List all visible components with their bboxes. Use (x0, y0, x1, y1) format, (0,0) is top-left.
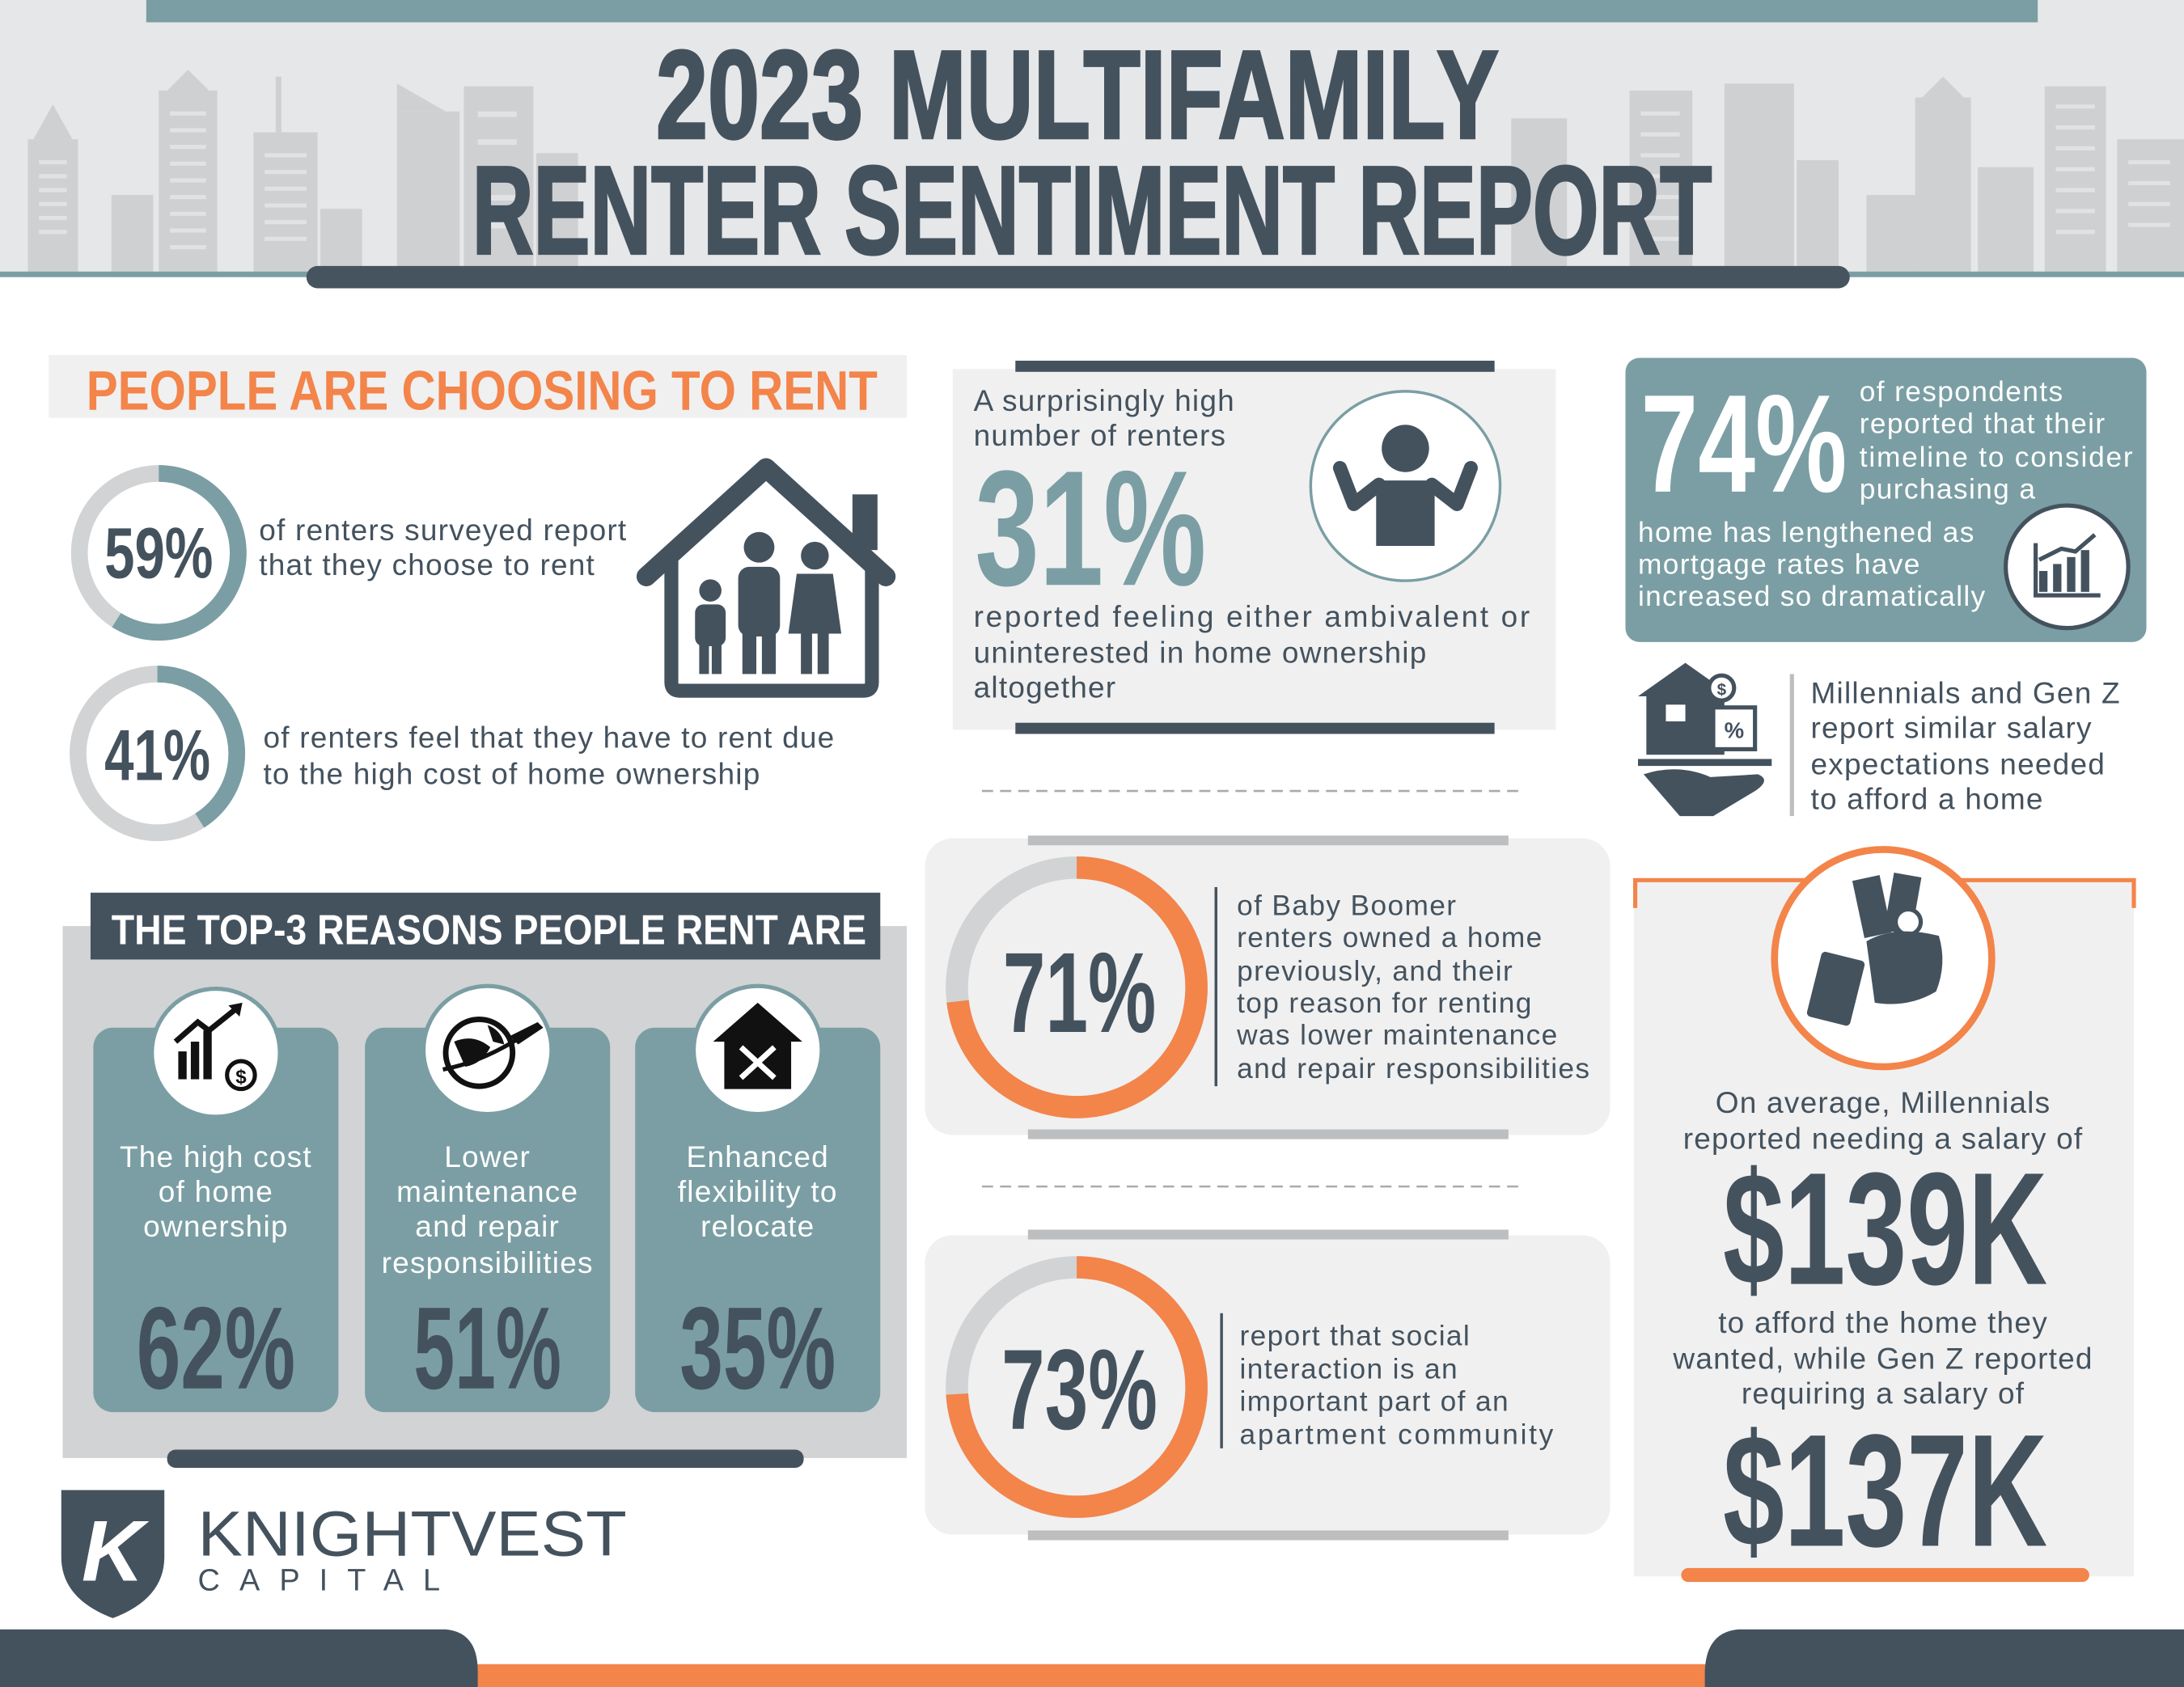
panel: 71% baby boomers: of Baby Boomer (1237, 890, 1457, 921)
card: high cost 62%: The high cost (120, 1139, 312, 1173)
card: flexibility 35%: 35% (679, 1283, 836, 1414)
card: high cost 62%: 62% (137, 1283, 295, 1414)
panel: 71% baby boomers: and repair responsibilities (1237, 1053, 1590, 1084)
panel: 71% baby boomers: renters owned a home (1237, 922, 1543, 953)
card: high cost 62% (93, 989, 338, 1414)
icon: bar chart (2006, 505, 2128, 628)
panel: 71% baby boomers: top reason for renting (1237, 987, 1533, 1019)
panel: 74% timeline: home has lengthened as (1638, 517, 1975, 548)
heading: people are choosing to rent: PEOPLE ARE CHOOSING TO RENT (87, 359, 878, 421)
panel: 71% baby boomers: 71% (1003, 928, 1156, 1056)
card: flexibility 35%: flexibility to (678, 1174, 838, 1208)
stat: 59%: that they choose to rent (259, 548, 595, 581)
card: high cost 62%: of home (159, 1174, 273, 1208)
stat: 41%: 41% (104, 714, 210, 795)
panel: 73% social interaction (925, 1229, 1610, 1540)
card: high cost 62%: ownership (143, 1209, 289, 1243)
card: lower maintenance 51%: responsibilities (382, 1245, 594, 1279)
card: flexibility 35%: relocate (700, 1209, 815, 1243)
panel: 73% social interaction: 73% (1001, 1326, 1158, 1453)
panel: top-3 reasons (62, 893, 907, 1468)
stat: 59% (79, 473, 627, 632)
panel: salary (1634, 849, 2134, 1582)
icon: house in hand (1638, 663, 1771, 816)
card: flexibility 35%: Enhanced (687, 1139, 829, 1173)
panel: salary: $137K (1723, 1401, 2047, 1579)
text: millennials and gen z: to afford a home (1811, 781, 2044, 815)
panel: 73% social interaction: important part of an (1240, 1385, 1509, 1417)
panel: 74% timeline: mortgage rates have (1638, 548, 1921, 580)
panel: 31% ambivalent: reported feeling either ambivalent or (974, 599, 1530, 633)
title (472, 24, 1712, 280)
panel: 71% baby boomers (925, 835, 1610, 1139)
panel: 74% timeline: purchasing a (1860, 473, 2036, 505)
text: millennials and gen z: Millennials and Gen Z (1811, 676, 2121, 710)
stat: 59%: of renters surveyed report (259, 513, 627, 547)
panel: 74% timeline: reported that their (1860, 408, 2106, 440)
panel: 74% timeline: 74% (1640, 366, 1847, 522)
icon: house in hand: $ (1717, 680, 1727, 699)
title: 2023 MULTIFAMILY (656, 24, 1499, 164)
stat: 41%: of renters feel that they have to rent due (263, 721, 835, 755)
logo: Knightvest Capital (61, 1490, 627, 1618)
card: lower maintenance 51%: 51% (413, 1283, 561, 1414)
logo: Knightvest Capital: KNIGHTVEST (198, 1497, 627, 1569)
panel: 73% social interaction: report that social (1240, 1320, 1471, 1351)
panel: 31% ambivalent: altogether (974, 670, 1116, 704)
panel: 74% timeline: increased so dramatically (1638, 581, 1986, 612)
text: millennials and gen z: report similar salary (1811, 711, 2093, 745)
panel: 31% ambivalent (953, 361, 1555, 734)
panel: 74% timeline: of respondents (1860, 376, 2063, 408)
panel: 31% ambivalent: number of renters (974, 418, 1226, 452)
card: flexibility 35% (635, 986, 880, 1414)
panel: salary: wanted, while Gen Z reported (1672, 1342, 2093, 1376)
icon: house with family (646, 468, 886, 691)
stat: 41% (78, 674, 835, 833)
panel: salary: $139K (1723, 1139, 2047, 1318)
panel: 31% ambivalent: uninterested in home ownership (974, 636, 1428, 670)
footer bars (0, 1630, 2184, 1687)
panel: 74% timeline: timeline to consider (1860, 442, 2134, 473)
stat: 59%: 59% (104, 513, 213, 594)
card: lower maintenance 51%: Lower (444, 1139, 531, 1173)
panel: salary: requiring a salary of (1742, 1376, 2025, 1410)
icon: house in hand: % (1725, 718, 1744, 743)
icon: money in hand (1775, 849, 1991, 1067)
text: millennials and gen z (1790, 674, 2121, 816)
panel: salary: reported needing a salary of (1683, 1122, 2083, 1156)
panel: salary: to afford the home they (1718, 1305, 2048, 1339)
panel: 31% ambivalent: 31% (975, 437, 1206, 620)
card: lower maintenance 51%: and repair (415, 1209, 560, 1243)
heading: top-3 reasons: THE TOP-3 REASONS PEOPLE RENT ARE (112, 906, 866, 953)
logo: Knightvest Capital: K (82, 1502, 150, 1599)
panel: 71% baby boomers: was lower maintenance (1236, 1019, 1559, 1051)
card: lower maintenance 51%: maintenance (396, 1174, 578, 1208)
heading: top-3 reasons (91, 893, 880, 959)
panel: 73% social interaction: interaction is an (1240, 1354, 1458, 1385)
logo: Knightvest Capital: CAPITAL (198, 1563, 440, 1597)
card: lower maintenance 51% (365, 986, 610, 1414)
header background (0, 0, 2184, 288)
text: millennials and gen z: expectations needed (1811, 746, 2106, 780)
stat: 41%: to the high cost of home ownership (263, 756, 761, 790)
panel: salary: On average, Millennials (1716, 1085, 2051, 1119)
panel: 73% social interaction: apartment community (1240, 1419, 1555, 1451)
panel: 74% timeline (1626, 358, 2147, 642)
card: high cost 62%: $ (235, 1067, 247, 1089)
panel: 31% ambivalent: A surprisingly high (974, 383, 1235, 417)
icon: shrugging person (1310, 391, 1500, 581)
panel: 71% baby boomers: previously, and their (1237, 955, 1513, 987)
